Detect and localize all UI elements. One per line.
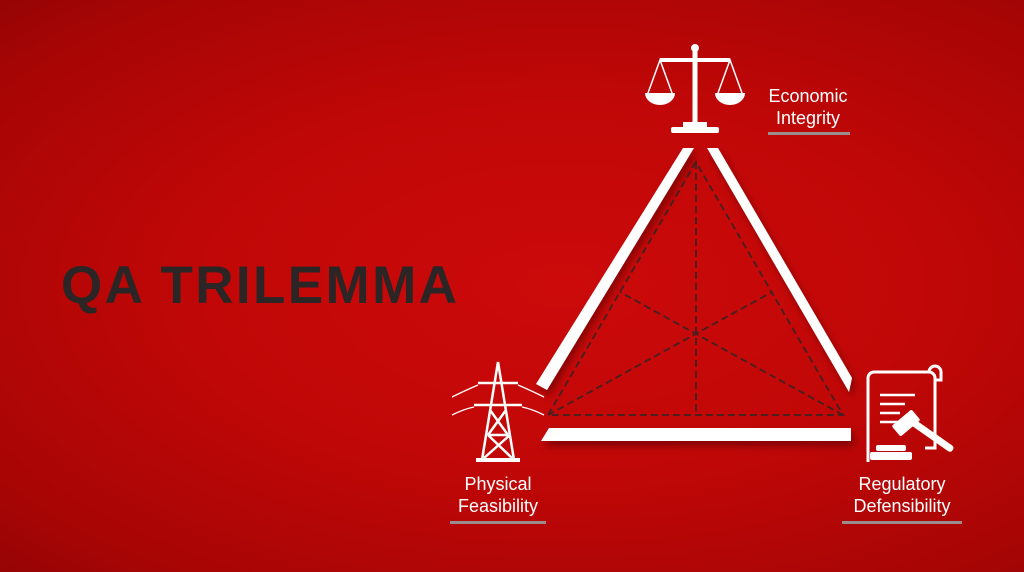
label: Economic Integrity: Integrity — [776, 108, 840, 128]
label: Regulatory Defensibility: Regulatory — [858, 474, 946, 494]
label: Physical Feasibility: Feasibility — [458, 496, 538, 516]
title: QA TRILEMMA — [61, 256, 459, 315]
label: Economic Integrity: Economic — [768, 86, 848, 106]
label: Physical Feasibility: Physical — [464, 474, 532, 494]
label: Physical Feasibility — [458, 474, 538, 516]
icon: document with gavel — [868, 366, 955, 462]
label: Economic Integrity — [768, 86, 848, 128]
icon: power tower — [452, 362, 544, 460]
label: Regulatory Defensibility: Defensibility — [853, 496, 951, 516]
triangle frame bars — [536, 148, 852, 441]
label: Regulatory Defensibility — [853, 474, 951, 516]
icon: scales — [645, 44, 745, 133]
dashed inner lines — [548, 162, 843, 415]
